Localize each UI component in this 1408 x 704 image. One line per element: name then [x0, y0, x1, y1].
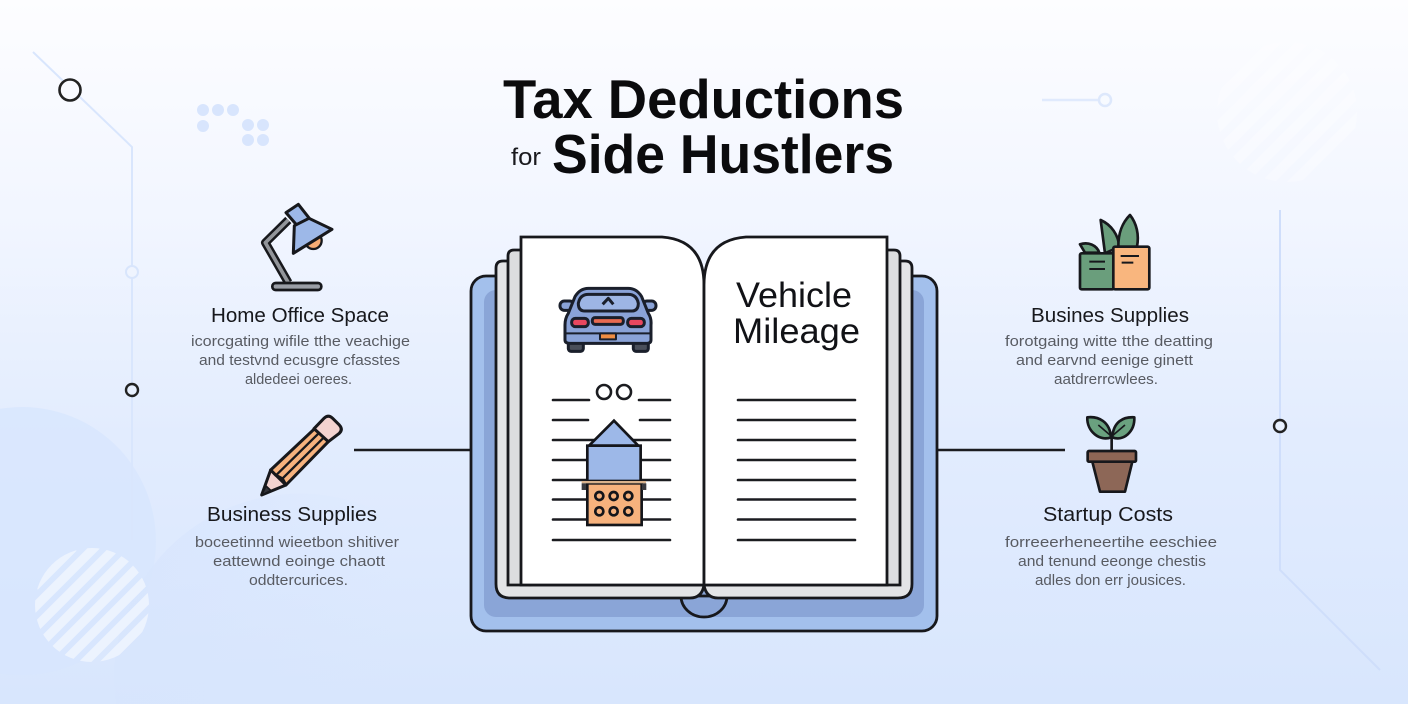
icon: pencil	[262, 416, 341, 495]
panel: open book	[471, 237, 937, 631]
description	[195, 534, 399, 589]
accent ring: mid right	[1274, 420, 1286, 432]
title: Tax Deductions	[503, 68, 904, 130]
description	[1005, 534, 1217, 589]
icon: folders with leaves	[1080, 215, 1149, 289]
page heading: Mileage	[733, 312, 860, 351]
heading: Home Office Space	[211, 305, 389, 327]
connector line: right	[937, 449, 1065, 451]
page heading: Vehicle	[736, 276, 852, 315]
panel: startup costs	[1005, 417, 1217, 589]
right page text lines	[738, 400, 855, 540]
description: icorcgating wifile tthe veachige	[191, 333, 410, 350]
description: and earvnd eenige ginett	[1016, 352, 1194, 369]
description: boceetinnd wieetbon shitiver	[195, 534, 399, 551]
book cover	[471, 276, 937, 631]
description: forotgaing witte tthe deatting	[1005, 333, 1213, 350]
icon: car	[560, 288, 656, 351]
accent ring: mid left	[126, 384, 138, 396]
heading: Busines Supplies	[1031, 305, 1189, 327]
description: aatdrerrcwlees.	[1054, 371, 1158, 388]
left page text lines	[553, 385, 670, 540]
icon: desk lamp	[265, 204, 332, 290]
panel: home office space	[191, 204, 410, 388]
title: for	[511, 144, 541, 171]
heading: Business Supplies	[207, 504, 377, 526]
description: forreeerheneertihe eeschiee	[1005, 534, 1217, 551]
icon: house	[582, 421, 646, 525]
panel: business supplies left	[195, 416, 399, 589]
panel: business supplies right	[1005, 215, 1213, 388]
heading: Startup Costs	[1043, 504, 1173, 526]
description: oddtercurices.	[249, 572, 348, 589]
description: adles don err jousices.	[1035, 572, 1186, 589]
connector line: left	[354, 449, 471, 451]
description: and tenund eeonge chestis	[1018, 553, 1206, 570]
title: Side Hustlers	[552, 123, 894, 185]
description: and testvnd ecusgre cfasstes	[199, 352, 400, 369]
description: eattewnd eoinge chaott	[213, 553, 386, 570]
description	[1005, 333, 1213, 388]
accent ring: top left	[60, 80, 80, 100]
page heading	[733, 276, 860, 351]
description	[191, 333, 410, 388]
title	[503, 68, 904, 185]
left page	[521, 237, 704, 585]
page stack	[496, 250, 912, 598]
right page	[704, 237, 887, 585]
description: aldedeei oerees.	[245, 371, 352, 388]
icon: potted plant	[1087, 417, 1136, 492]
